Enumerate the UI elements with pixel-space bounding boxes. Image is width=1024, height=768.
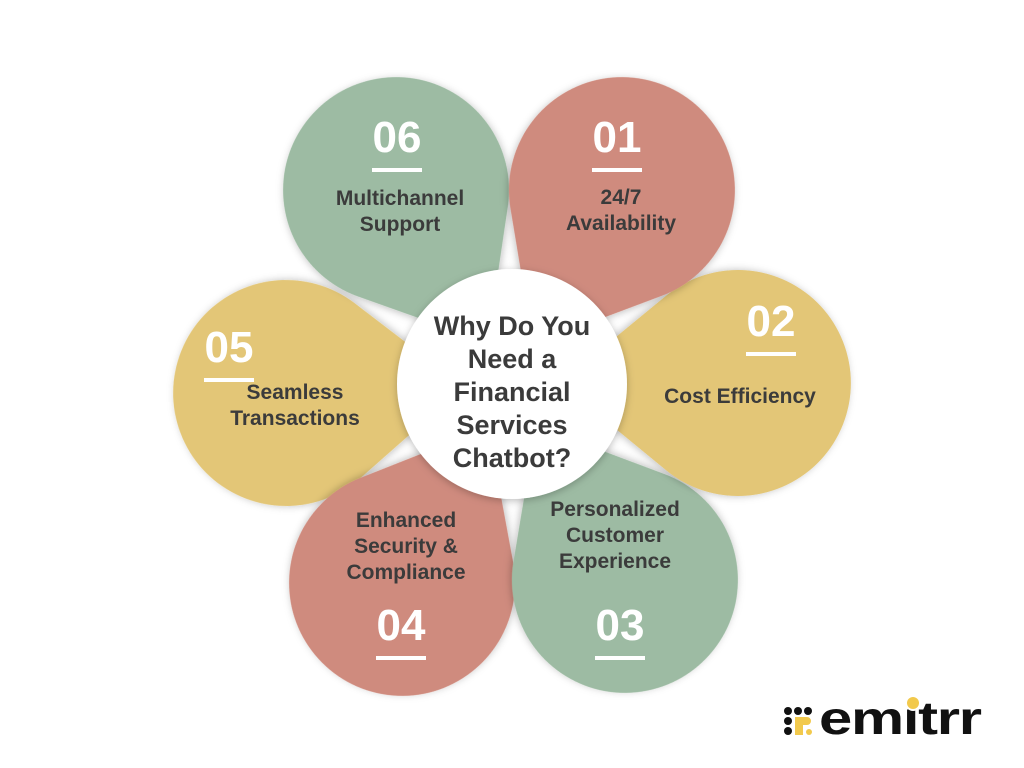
title: Services: [456, 410, 568, 440]
label 03: [550, 498, 680, 573]
petal 01: [435, 36, 776, 401]
label 04: [346, 509, 466, 584]
petal 06: [241, 35, 585, 401]
number 04: 04: [377, 601, 425, 650]
label 06: Support: [360, 213, 440, 236]
petal 05: [169, 274, 468, 510]
title: Need a: [468, 344, 556, 374]
petal 02: [560, 270, 851, 496]
number 01: 01: [593, 113, 641, 162]
label 03: Experience: [559, 550, 671, 573]
label 04: Security &: [354, 535, 458, 558]
title: Chatbot?: [453, 443, 571, 473]
label 02: Cost Efficiency: [664, 385, 816, 408]
number 06: 06: [373, 113, 421, 162]
label 04: Compliance: [346, 561, 466, 584]
logo: emitrr: emitrr: [819, 692, 981, 744]
label 06: Multichannel: [336, 187, 464, 210]
label 05: Seamless: [247, 381, 343, 404]
label 04: Enhanced: [356, 509, 456, 532]
label 05: [230, 381, 360, 430]
title: Why Do You: [434, 311, 590, 341]
label 06: [336, 187, 464, 236]
label 01: 24/7: [601, 186, 641, 209]
petal 04: [248, 373, 587, 737]
label 01: Availability: [566, 212, 676, 235]
number 02: 02: [747, 297, 795, 346]
label 05: Transactions: [230, 407, 360, 430]
number 03: 03: [596, 601, 644, 650]
title: [434, 311, 590, 473]
petal 03: [438, 369, 779, 734]
label 03: Personalized: [550, 498, 680, 521]
title: Financial: [453, 377, 571, 407]
label 01: [566, 186, 676, 235]
center circle: [397, 269, 627, 499]
label 03: Customer: [566, 524, 664, 547]
number 05: 05: [205, 323, 253, 372]
